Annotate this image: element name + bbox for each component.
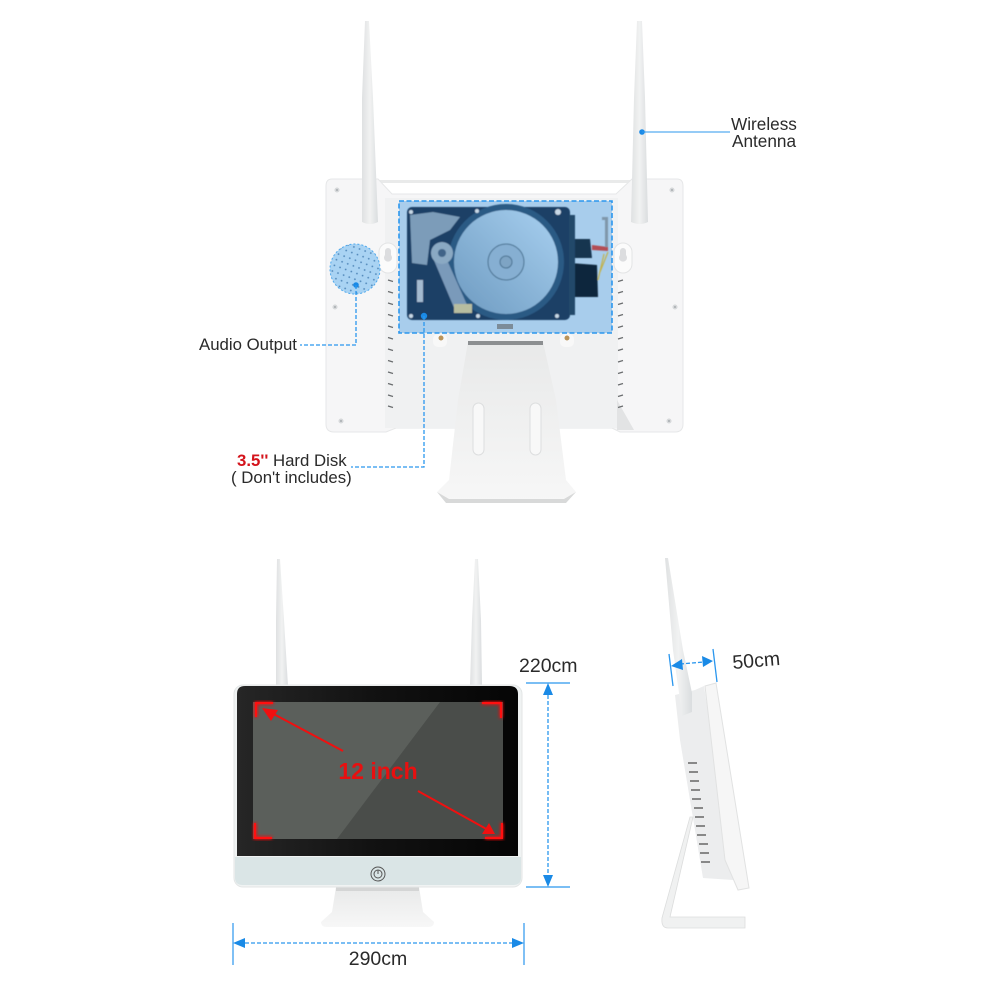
callout: wireless antenna: Wireless — [731, 114, 797, 134]
stand — [437, 341, 576, 503]
callout: audio output: Audio Output — [199, 335, 297, 354]
vents — [388, 280, 623, 408]
rear housing — [326, 179, 683, 432]
screen size label: 12 inch — [338, 758, 418, 784]
callout: wireless antenna — [639, 114, 797, 151]
dimension: height 220cm — [519, 655, 578, 887]
hard disk — [407, 204, 608, 320]
callout: audio output — [199, 282, 359, 354]
red corner marks — [255, 703, 502, 838]
dimension: depth 50cm: 50cm — [732, 648, 781, 674]
dimension: height 220cm: 220cm — [519, 655, 578, 677]
bezel — [237, 686, 518, 856]
speaker highlight: audio output — [330, 244, 380, 294]
device: side view monitor — [662, 558, 749, 928]
gold screws — [433, 334, 574, 347]
power button — [371, 867, 385, 881]
screws — [333, 188, 677, 423]
stand — [662, 817, 745, 928]
dimension: width 290cm: 290cm — [349, 948, 407, 970]
antenna: left — [362, 21, 378, 224]
keyhole mounts — [379, 243, 632, 273]
callout: hard disk: ( Don't includes) — [231, 468, 352, 487]
vents — [688, 763, 710, 862]
screen panel — [705, 683, 749, 890]
antenna: right — [631, 21, 648, 224]
device: front view monitor — [234, 559, 522, 927]
callout: wireless antenna: Antenna — [732, 131, 796, 151]
red diagonal arrows — [262, 708, 495, 834]
hard disk bay highlight — [399, 201, 612, 333]
chin — [235, 857, 521, 885]
antenna — [665, 558, 692, 716]
dimension: depth 50cm — [669, 648, 781, 686]
stand — [321, 887, 434, 927]
dimension: width 290cm — [233, 923, 524, 970]
rear housing — [675, 686, 733, 880]
callout: hard disk — [231, 313, 427, 487]
antennas — [276, 559, 288, 686]
monitor body — [234, 685, 522, 887]
device: rear view monitor — [326, 21, 683, 503]
callout: hard disk: 3.5'' Hard Disk — [237, 451, 347, 470]
screen — [253, 702, 503, 839]
